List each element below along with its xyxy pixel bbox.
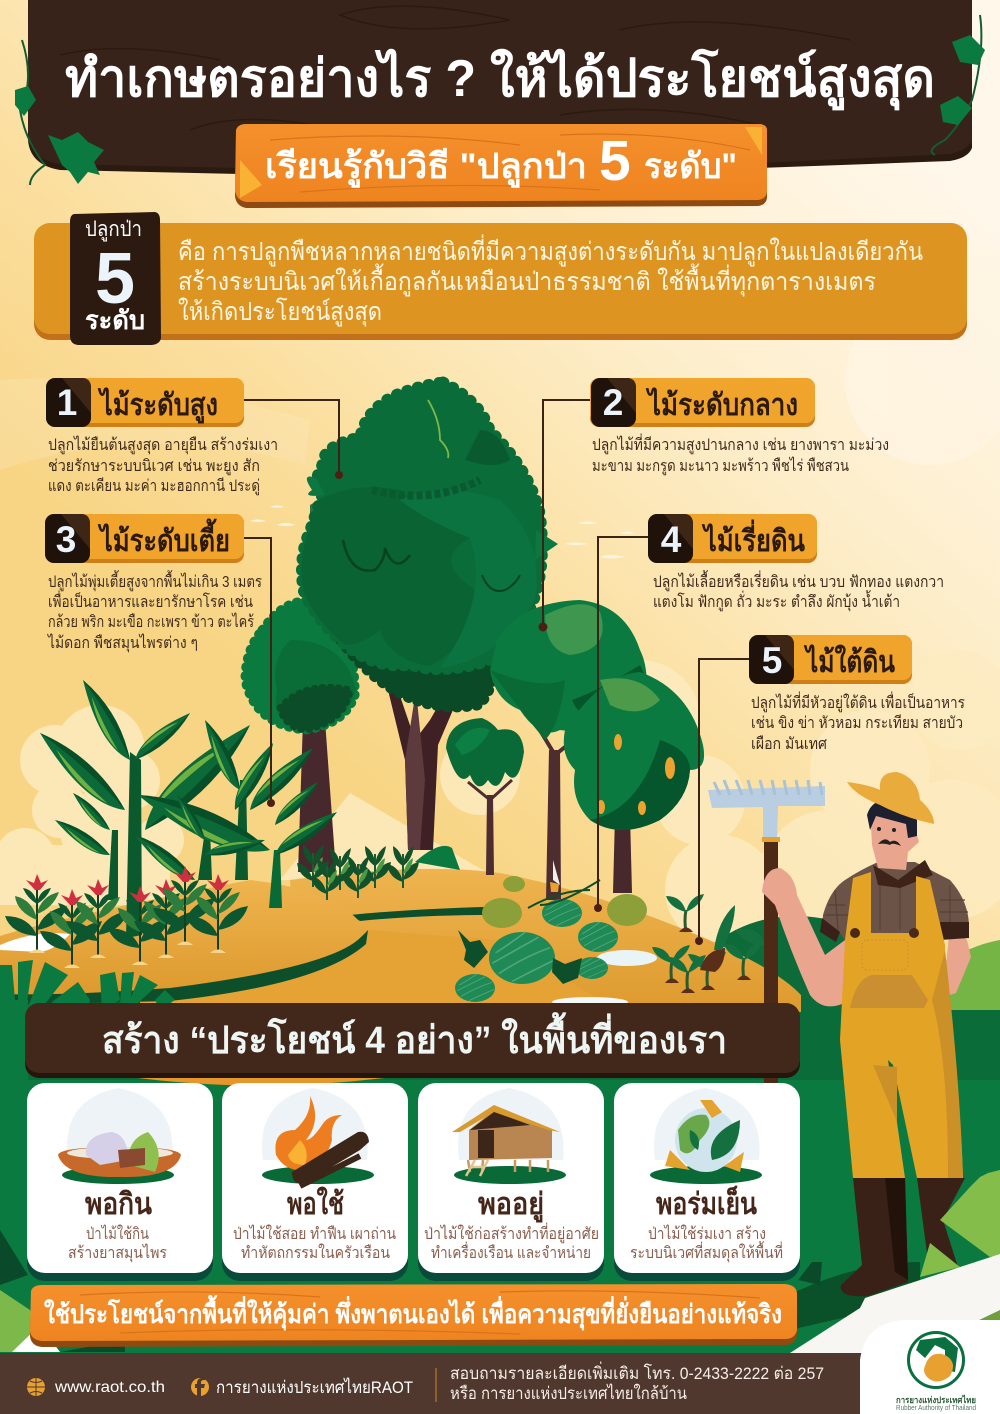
hat	[847, 772, 934, 824]
subtitle end text: ระดับ"	[644, 147, 737, 186]
panel: level 5: 5	[762, 640, 782, 681]
card: use	[222, 1083, 408, 1281]
tree: left medium tree	[245, 601, 356, 872]
panel: level 4	[648, 514, 944, 612]
card: shade	[614, 1083, 800, 1281]
shirt	[822, 862, 969, 945]
tree: rubber tree level 2	[490, 600, 648, 900]
level 5 description: เผือก มันเทศ	[751, 735, 827, 753]
card: food: พอกิน	[85, 1188, 152, 1221]
level 1 description: แดง ตะเคียน มะค่า มะฮอกกานี ประดู่	[48, 477, 260, 496]
panel: level 1	[46, 378, 278, 496]
card: shade: พอร่มเย็น	[656, 1185, 757, 1221]
card: use: พอใช้	[287, 1186, 344, 1221]
heading banner: 4 benefits: สร้าง “ประโยชน์ 4 อย่าง” ในพื้นที่ของเรา	[102, 1012, 727, 1062]
tree: tall tree level 1	[302, 382, 558, 850]
card: food: ป่าไม้ใช้กิน	[86, 1224, 149, 1243]
rake	[708, 780, 825, 1083]
farmer	[708, 772, 971, 1296]
melons and pumpkins	[455, 876, 647, 1002]
title: ทำเกษตรอย่างไร ? ให้ได้ประโยชน์สูงสุด	[65, 47, 935, 111]
footer: การยางแห่งประเทศไทยRAOT	[216, 1377, 413, 1397]
sun halo	[845, 250, 1000, 465]
left arm	[762, 868, 850, 1006]
icon: globe	[27, 1378, 45, 1396]
contact text: สอบถามรายละเอียดเพิ่มเติม โทร. 0-2433-2222 ต่อ 257	[450, 1361, 824, 1383]
logo mark	[908, 1332, 964, 1388]
card: shade: ป่าไม้ใช้ร่มเงา สร้าง	[648, 1224, 766, 1243]
level 5 description	[751, 691, 965, 753]
subtitle text: เรียนรู้กับวิธี "ปลูกป่า	[265, 147, 587, 188]
panel: level 2: ไม้ระดับกลาง	[645, 387, 798, 422]
level 3 description: ไม้ดอก พืชสมุนไพรต่าง ๆ	[46, 633, 198, 653]
card: shelter: ทำเครื่องเรือน และจำหน่าย	[431, 1241, 591, 1262]
level 3 description: เพื่อเป็นอาหารและยารักษาโรค เช่น	[48, 590, 253, 611]
intro text: สร้างระบบนิเวศให้เกื้อกูลกันเหมือนป่าธรรมชาติ ใช้พื้นที่ทุกตารางเมตร	[178, 263, 876, 297]
birds	[250, 506, 634, 558]
level 2 description: มะขาม มะกรูด มะนาว มะพร้าว พืชไร่ พืชสวน	[592, 456, 849, 476]
badge: 5 levels: ปลูกป่า	[85, 218, 142, 242]
panel: level 2: 2	[603, 382, 623, 423]
boots	[841, 1178, 965, 1296]
card: shelter: พออยู่	[478, 1188, 544, 1223]
banana plants	[32, 676, 341, 938]
subtitle number: 5	[599, 129, 631, 193]
panel: level 3: ไม้ระดับเตี้ย	[97, 518, 230, 558]
connector lines	[244, 400, 749, 941]
level 3 description: กล้วย พริก มะเขือ กะเพรา ข้าว ตะไคร้	[48, 612, 254, 631]
panel: level 4: ไม้เรี่ยดิน	[701, 519, 805, 558]
connector dots	[267, 471, 703, 945]
level 1 description	[48, 435, 278, 496]
level 1 description: ช่วยรักษาระบบนิเวศ เช่น พะยูง สัก	[48, 458, 260, 476]
level 1 description: ปลูกไม้ยืนต้นสูงสุด อายุยืน สร้างร่มเงา	[48, 435, 278, 455]
ground and hills	[0, 869, 1000, 1360]
card: food	[27, 1083, 213, 1281]
panel: level 1: 1	[57, 382, 77, 423]
logo panel: การยางแห่งประเทศไทย	[896, 1394, 976, 1405]
footer	[0, 1353, 862, 1414]
panel: level 1: ไม้ระดับสูง	[97, 387, 218, 424]
level 5 description: เช่น ขิง ข่า หัวหอม กระเทียม สายบัว	[751, 714, 963, 732]
header wood board	[28, 0, 972, 174]
card: shelter	[418, 1083, 604, 1281]
intro text: ให้เกิดประโยชน์สูงสุด	[178, 297, 382, 327]
tree: mango tree	[564, 672, 704, 893]
red flowering plants	[5, 866, 248, 968]
heading banner: 4 benefits	[25, 1003, 800, 1078]
card: use: ป่าไม้ใช้สอย ทำฟืน เผาถ่าน	[233, 1224, 396, 1243]
card: use: ทำหัตถกรรมในครัวเรือน	[241, 1243, 390, 1262]
intro text	[178, 234, 923, 327]
white hillside behind logo	[790, 1254, 1000, 1414]
herbs row	[297, 845, 460, 900]
background sky	[0, 0, 1000, 1100]
badge: 5 levels: 5	[95, 239, 135, 319]
root vegetables	[652, 894, 765, 993]
icon: stilt hut	[452, 1105, 566, 1184]
level 5 description: ปลูกไม้ที่มีหัวอยู่ใต้ดิน เพื่อเป็นอาหาร	[751, 691, 965, 713]
closing orange banner	[30, 1284, 797, 1347]
level 3 description	[46, 570, 262, 653]
background clouds	[0, 378, 1000, 950]
foreground leaves left	[0, 960, 175, 1100]
badge: 5 levels: ระดับ	[85, 305, 145, 335]
subtitle orange board	[235, 124, 767, 208]
panel: level 3: 3	[56, 519, 76, 560]
card: shelter: ป่าไม้ใช้ก่อสร้างทำที่อยู่อาศัย	[424, 1222, 599, 1244]
panel: level 5: ไม้ใต้ดิน	[804, 644, 895, 679]
contact text	[450, 1361, 824, 1403]
icon: facebook	[191, 1378, 209, 1396]
card: shade: ระบบนิเวศที่สมดุลให้พื้นที่	[630, 1241, 783, 1263]
intro bar	[34, 223, 967, 340]
collar	[873, 860, 933, 888]
logo panel	[860, 1320, 1000, 1414]
closing orange banner: ใช้ประโยชน์จากพื้นที่ให้คุ้มค่า พึ่งพาตนเองได้ เพื่อความสุขที่ยั่งยืนอย่างแท้จริง	[44, 1294, 782, 1331]
panel: level 5	[749, 635, 965, 753]
card: food: สร้างยาสมุนไพร	[68, 1243, 167, 1263]
head	[870, 808, 919, 870]
panel: level 4: 4	[661, 519, 682, 560]
level 4 description: แตงโม ฟักกูด ถั่ว มะระ ตำลึง ผักบุ้ง น้ำเต้า	[653, 590, 900, 612]
bottom corner foliage	[0, 1170, 1000, 1352]
level 2 description: ปลูกไม้ที่มีความสูงปานกลาง เช่น ยางพารา มะม่วง	[592, 433, 889, 455]
tree: umbrella small tree	[446, 718, 524, 875]
footer: www.raot.co.th	[54, 1379, 165, 1396]
icon: rice plate	[58, 1132, 181, 1184]
level 3 description: ปลูกไม้พุ่มเตี้ยสูงจากพื้นไม่เกิน 3 เมตร	[48, 570, 262, 592]
level 2 description	[592, 433, 889, 476]
level 4 description	[653, 570, 944, 612]
logo panel: Rubber Authority of Thailand	[896, 1405, 976, 1412]
overalls	[840, 872, 963, 1178]
contact text: หรือ การยางแห่งประเทศไทยใกล้บ้าน	[450, 1383, 687, 1403]
panel: level 2	[590, 378, 889, 476]
vines and leaves on header	[15, 15, 985, 185]
icon: globe and leaf	[650, 1100, 762, 1184]
panel: level 3	[45, 514, 262, 653]
intro text: คือ การปลูกพืชหลากหลายชนิดที่มีความสูงต่างระดับกัน มาปลูกในแปลงเดียวกัน	[178, 234, 923, 267]
badge: 5 levels	[70, 212, 161, 345]
icon: fire and wood	[262, 1096, 374, 1186]
level 4 description: ปลูกไม้เลื้อยหรือเรี่ยดิน เช่น บวบ ฟักทอง แตงกวา	[653, 570, 944, 592]
right arm	[905, 925, 971, 1007]
